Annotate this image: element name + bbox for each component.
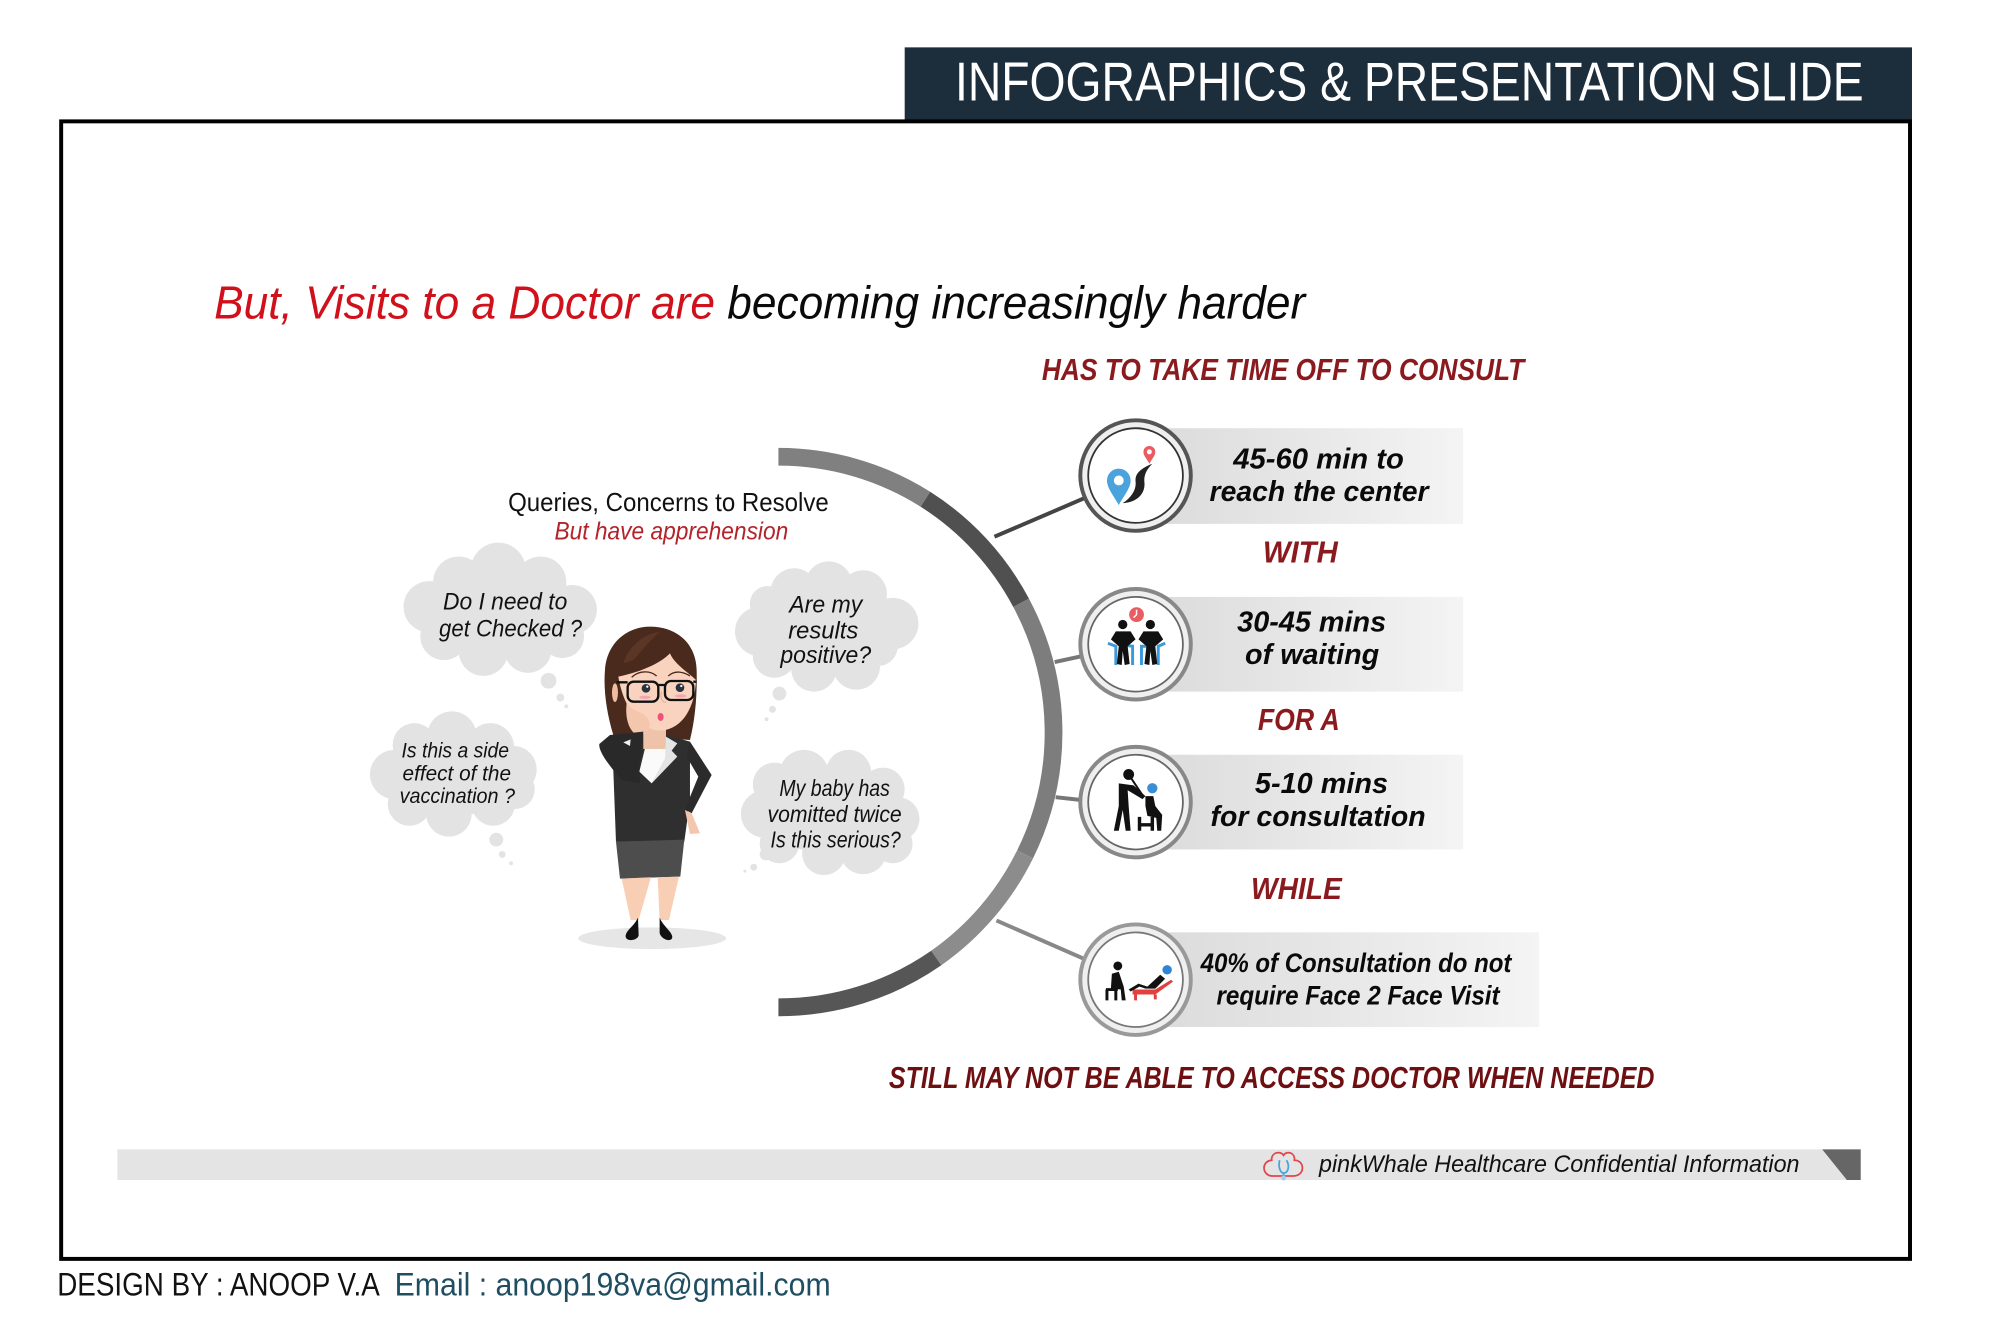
- step 4: face to face visit: [1080, 924, 1539, 1035]
- thought cloud: side effect of the vaccination: [370, 711, 537, 865]
- step 1: reach the center: 45-60 min to: [1232, 444, 1404, 476]
- connector word: for a: FOR A: [1258, 703, 1340, 737]
- header banner: INFOGRAPHICS & PRESENTATION SLIDE: [955, 53, 1864, 113]
- step 4: face to face visit: require Face 2 Face Visit: [1216, 980, 1501, 1010]
- thought cloud: are my results positive: [735, 561, 919, 721]
- step 3: consultation: [1080, 747, 1463, 857]
- thought cloud: side effect of the vaccination: vaccination ?: [400, 783, 515, 808]
- icon: doctor examining patient: [1114, 769, 1162, 831]
- connector lines: [994, 498, 1084, 959]
- thought cloud: my baby has vomitted: vomitted twice: [768, 801, 902, 827]
- connector word: with: WITH: [1263, 535, 1339, 569]
- thought cloud: side effect of the vaccination: Is this a side: [402, 738, 509, 763]
- step 1: reach the center: reach the center: [1210, 476, 1430, 508]
- footer bar: [117, 1149, 1861, 1180]
- step 4: face to face visit: 40% of Consultation do not: [1200, 948, 1512, 978]
- thought cloud: do I need to get checked: get Checked ?: [439, 616, 583, 642]
- woman character: [578, 627, 726, 949]
- icon: two people waiting: [1108, 607, 1165, 665]
- thought cloud: my baby has vomitted: Is this serious?: [771, 826, 901, 852]
- connector word: while: WHILE: [1251, 872, 1343, 906]
- step 3: consultation: 5-10 mins: [1255, 768, 1388, 800]
- queries heading: Queries, Concerns to Resolve: [508, 489, 829, 517]
- icon: pinkWhale logo: [1264, 1153, 1302, 1180]
- heading: has to take time off: HAS TO TAKE TIME OFF TO CONSULT: [1042, 353, 1526, 387]
- step 1: reach the center: [1080, 420, 1463, 531]
- queries heading: But have apprehension: [554, 519, 788, 546]
- slide frame: [61, 121, 1910, 1259]
- thought cloud: side effect of the vaccination: effect of the: [403, 760, 511, 785]
- icon: map pins and road: [1107, 446, 1155, 505]
- designer credit: DESIGN BY : ANOOP V.A: [57, 1266, 380, 1302]
- heading: still may not be able: STILL MAY NOT BE ABLE TO ACCESS DOCTOR WHEN NEEDED: [889, 1061, 1654, 1095]
- footer bar: pinkWhale Healthcare Confidential Information: [1318, 1152, 1800, 1178]
- thought cloud: are my results positive: Are my: [787, 593, 864, 619]
- step 2: waiting: [1080, 589, 1463, 700]
- queries heading: [508, 489, 829, 546]
- thought cloud: my baby has vomitted: [741, 750, 919, 875]
- step 3: consultation: for consultation: [1211, 801, 1426, 833]
- step 2: waiting: of waiting: [1245, 639, 1379, 671]
- thought cloud: are my results positive: positive?: [779, 643, 872, 669]
- thought cloud: my baby has vomitted: My baby has: [779, 775, 890, 801]
- step 2: waiting: 30-45 mins: [1237, 606, 1386, 638]
- title: But, Visits to a Doctor are becoming increasingly harder: [214, 277, 1307, 329]
- icon: patient on couch with carer: [1106, 961, 1173, 1000]
- semicircular arc: [778, 457, 1054, 1007]
- thought cloud: do I need to get checked: Do I need to: [443, 590, 567, 616]
- designer credit: [57, 1266, 831, 1302]
- designer credit: Email : anoop198va@gmail.com: [395, 1266, 831, 1302]
- thought cloud: are my results positive: results: [788, 618, 858, 644]
- thought cloud: do I need to get checked: [404, 543, 597, 708]
